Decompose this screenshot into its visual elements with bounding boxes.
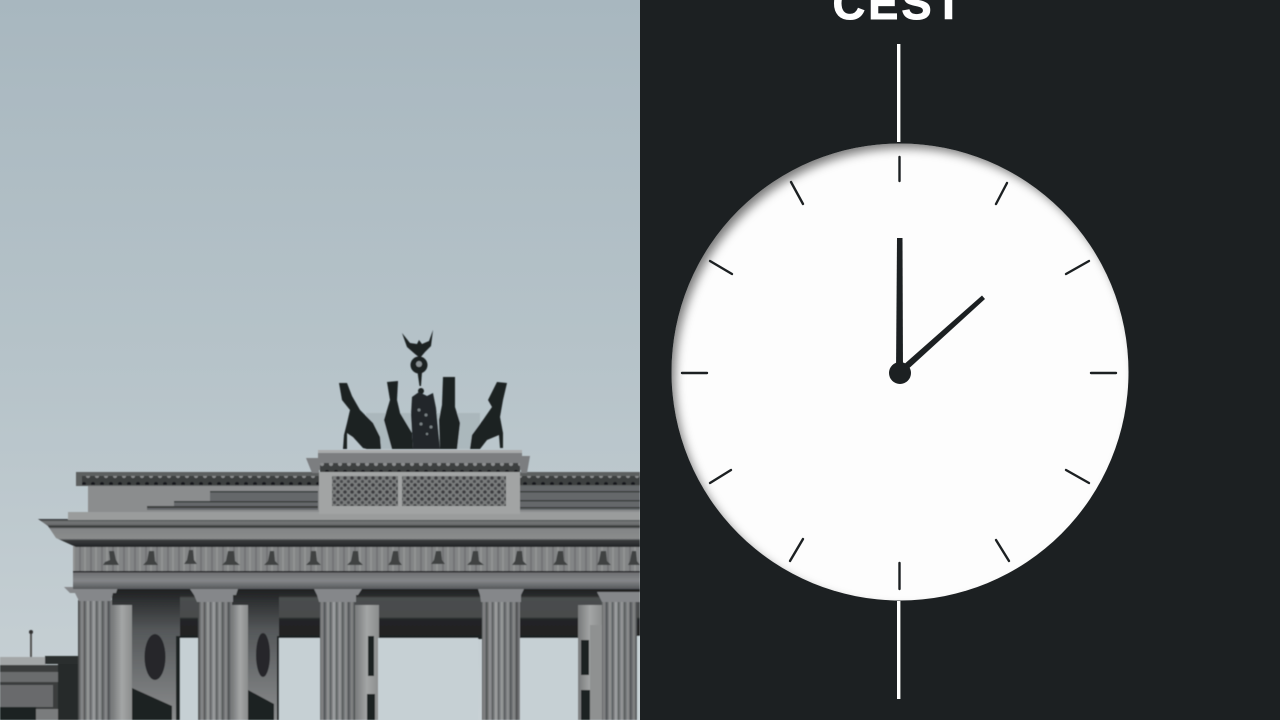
side walls and passages [112,592,602,720]
building: Brandenburg Gate [0,330,640,720]
frieze with metope reliefs [73,546,640,571]
clock face [672,144,1128,600]
cornice [38,519,640,547]
neighbouring building [0,630,78,720]
centre hub [889,362,911,384]
panel: sky photo [0,0,640,720]
under-ceiling of the gate [115,589,640,639]
column capitals [64,587,640,602]
chariot [411,392,440,449]
hour hand [901,296,985,372]
eagle standard [402,330,433,358]
minute hand [896,238,903,372]
attic storey [68,472,640,520]
top guide line [897,44,900,142]
inner left horse [384,381,413,449]
inner shadow [665,138,1145,618]
panel: dark clock background [640,0,1280,720]
hour ticks [682,157,1116,589]
architrave [73,572,640,589]
outer right horse [470,382,507,449]
sky openings [180,636,640,720]
clock showing 2 o'clock [665,138,1145,618]
quadriga sculpture [339,330,507,449]
columns [78,600,637,720]
outer left horse [339,383,381,449]
central pedestal [306,450,530,514]
inner right horse [439,377,460,449]
bottom guide line [897,601,900,699]
